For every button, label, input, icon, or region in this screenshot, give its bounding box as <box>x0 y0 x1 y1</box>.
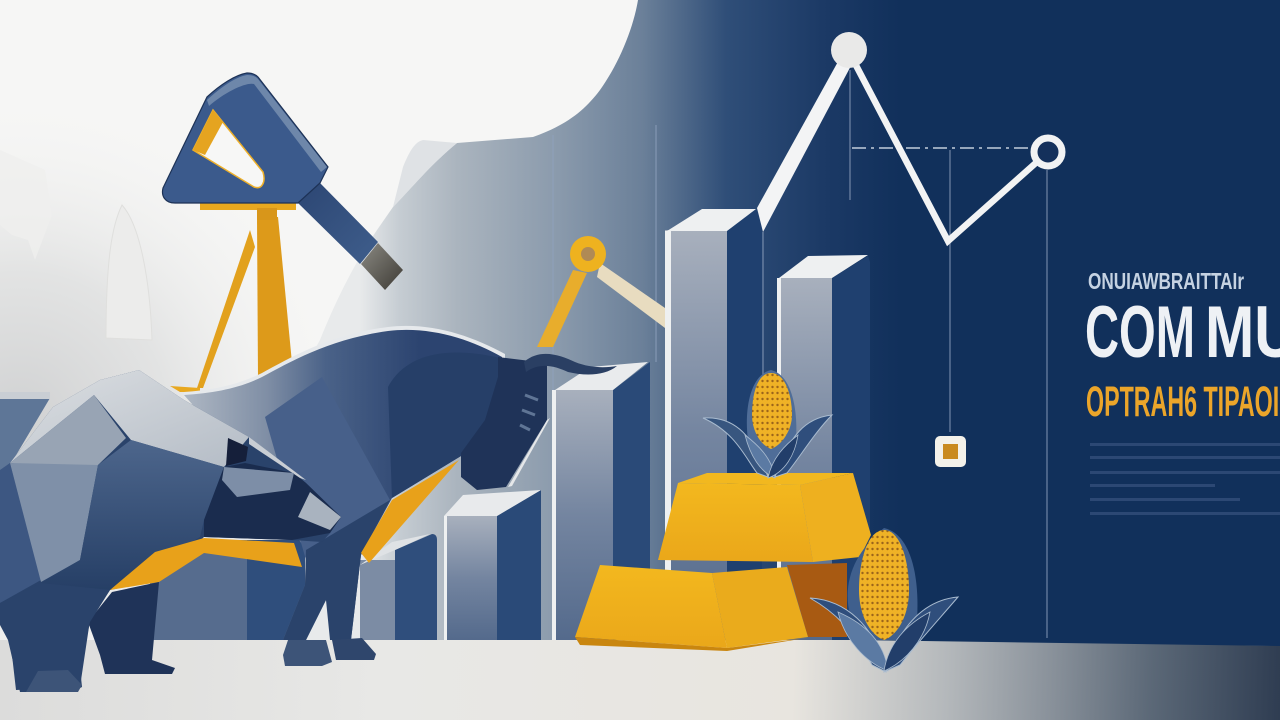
bear <box>0 370 341 692</box>
end marker <box>1034 138 1062 166</box>
bull dark shoulder <box>388 352 505 498</box>
leaves <box>810 597 958 672</box>
title: COM <box>1085 292 1195 373</box>
bull white edge <box>184 326 505 398</box>
icon: corn small <box>703 370 832 478</box>
icon: corn large <box>810 528 958 672</box>
guide lines <box>553 70 1047 638</box>
bull head <box>461 357 547 490</box>
ghost sketches on the left <box>0 150 152 340</box>
bear left facet <box>0 463 41 603</box>
left background shading <box>0 0 400 640</box>
rising line <box>757 58 853 232</box>
lower bar side <box>712 567 808 648</box>
bull <box>184 326 617 666</box>
lower bar edge <box>575 637 806 651</box>
lower bar front <box>575 565 727 648</box>
line chart <box>757 32 1062 467</box>
head top highlight <box>207 75 327 172</box>
bull muzzle highlight <box>508 418 550 487</box>
bull hoof front <box>283 640 332 666</box>
pump head <box>162 73 328 203</box>
pale hill behind panel <box>393 140 457 207</box>
bear snout <box>298 492 341 530</box>
husk <box>848 528 917 640</box>
bear grey facet <box>10 395 126 468</box>
floor <box>0 640 1280 720</box>
bear cheek facet <box>222 467 294 497</box>
animal at left edge <box>0 392 50 490</box>
bear ear <box>226 438 248 466</box>
bull face wrinkles <box>520 395 538 430</box>
ghost foliage <box>0 150 52 260</box>
gold bars <box>575 473 871 651</box>
shaft tip <box>361 243 403 290</box>
upper bar top <box>678 473 853 485</box>
bull body <box>184 330 505 640</box>
bull orange belly <box>361 460 459 563</box>
pivot arm <box>537 236 665 347</box>
pump shaft <box>298 183 378 264</box>
bear side facet <box>41 440 224 590</box>
body lines <box>1090 443 1280 515</box>
orange arm <box>537 270 587 347</box>
bear orange belly <box>110 538 302 590</box>
trend line <box>849 52 1047 241</box>
pivot <box>570 236 606 272</box>
bear silhouette <box>0 370 341 690</box>
bar 4 <box>552 362 650 640</box>
bear front leg <box>0 583 110 692</box>
peak marker <box>831 32 867 68</box>
bar 6 <box>777 255 870 640</box>
bar 2 <box>360 534 437 640</box>
cream arm <box>597 263 665 328</box>
bear hoof <box>26 670 82 692</box>
bear lower grey facet <box>10 463 98 582</box>
pivot centre <box>581 247 595 261</box>
ear <box>859 530 909 640</box>
square marker <box>935 436 966 467</box>
text block <box>1085 268 1280 515</box>
upper bar front <box>658 483 813 562</box>
bar 1 <box>150 540 305 640</box>
bear ridge highlight <box>249 437 306 480</box>
navy panel with curved edge <box>150 0 1280 646</box>
bear light top facet <box>10 370 249 467</box>
hole inner edge <box>193 110 223 155</box>
pump legs <box>170 203 296 392</box>
upper bar side <box>800 473 871 562</box>
bull chest facet <box>265 377 390 560</box>
bar 3 <box>444 490 541 640</box>
bull horn <box>524 354 617 374</box>
back brown bar <box>787 563 847 637</box>
bar 5 <box>665 209 762 640</box>
ghost tower <box>106 205 152 340</box>
icon: oil pump <box>162 73 403 392</box>
pump hole <box>193 110 264 188</box>
leaves <box>703 415 832 478</box>
bear head <box>204 463 341 540</box>
ear <box>752 373 792 449</box>
husk <box>747 370 796 470</box>
bear hind leg <box>88 582 175 674</box>
bull hoof back <box>332 638 376 660</box>
bull legs <box>283 500 390 640</box>
bar chart columns <box>150 209 870 640</box>
